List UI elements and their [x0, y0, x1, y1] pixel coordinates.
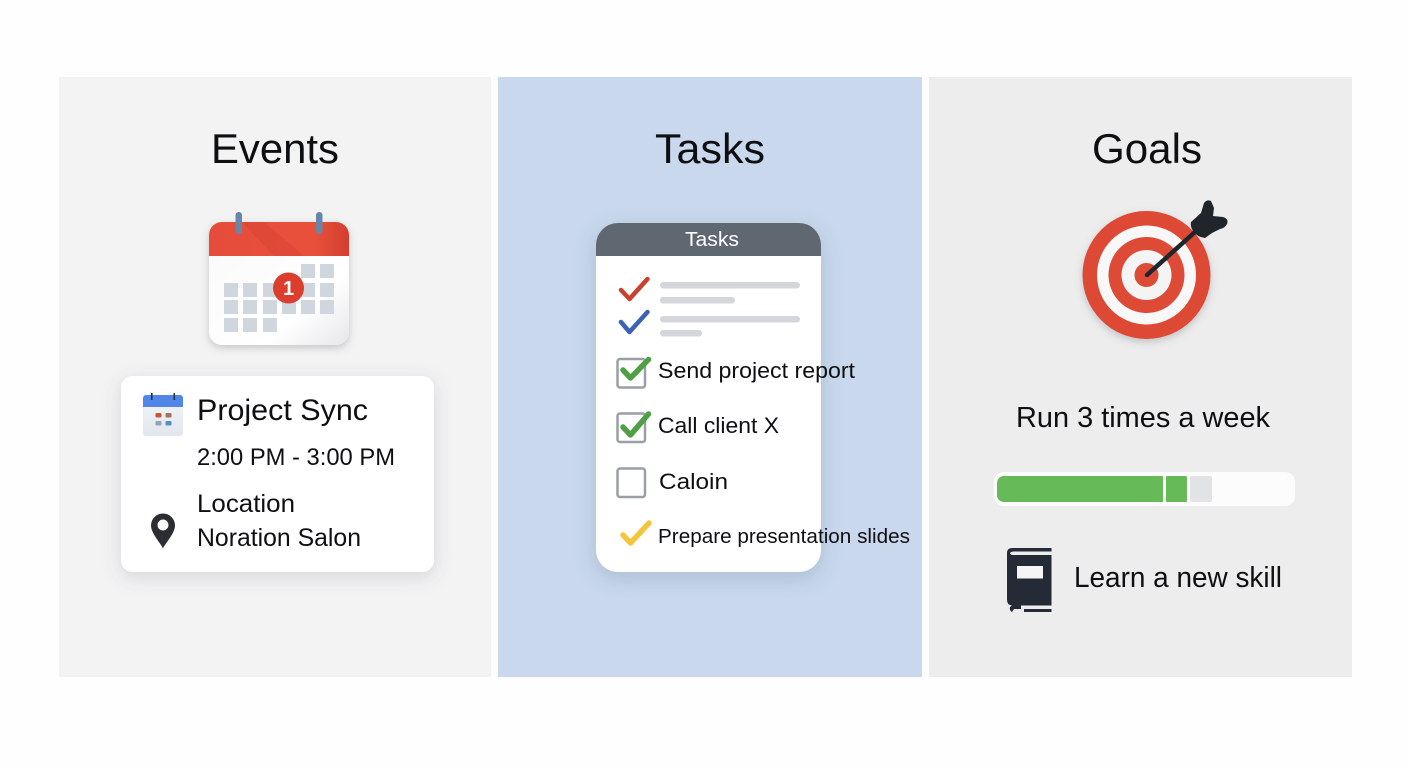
location label: Location [197, 490, 295, 518]
icon: calendar [209, 212, 349, 345]
progress bar [994, 472, 1295, 506]
heading: events: Events [211, 125, 339, 172]
red check item [621, 279, 800, 304]
heading: goals: Goals [1092, 125, 1202, 172]
event time: 2:00 PM - 3:00 PM [197, 444, 395, 471]
card: event details [121, 376, 434, 572]
icon: book [1007, 548, 1052, 612]
panel: goals [929, 77, 1352, 677]
icon: location pin [151, 514, 175, 548]
task: call client x: Call client X [658, 413, 779, 438]
goal: run 3 times a week: Run 3 times a week [1016, 402, 1271, 434]
task: call client x [618, 413, 779, 442]
calendar badge: 1 [283, 278, 294, 300]
event title: Project Sync [197, 394, 368, 427]
blue check item [621, 312, 800, 336]
goal: learn a new skill: Learn a new skill [1074, 562, 1282, 594]
card header [596, 223, 821, 256]
task: send project report [618, 358, 856, 388]
card header: Tasks [685, 229, 739, 251]
card: task list [596, 223, 910, 572]
task: send project report: Send project report [658, 358, 856, 383]
panel: events [59, 77, 491, 677]
icon: target with dart [1082, 200, 1228, 339]
task: caloin [618, 468, 728, 497]
task: caloin: Caloin [659, 469, 728, 494]
task: prepare presentation slides: Prepare presentation slides [658, 525, 910, 548]
icon: small calendar [143, 393, 183, 436]
location name: Noration Salon [197, 524, 361, 552]
panel: tasks [498, 77, 922, 677]
heading: tasks: Tasks [655, 125, 765, 172]
